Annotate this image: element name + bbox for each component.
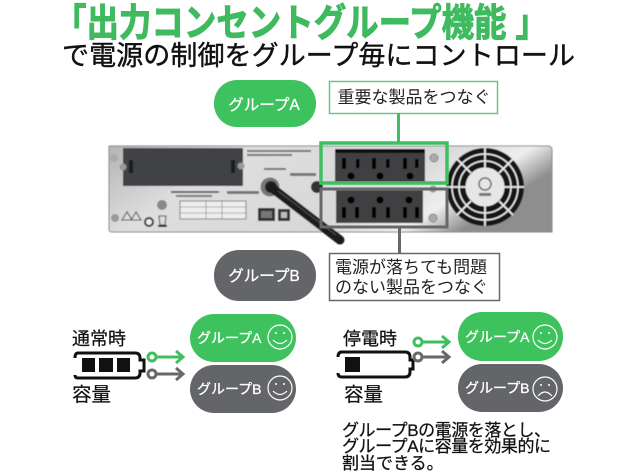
- cooling fan grille: [446, 148, 524, 226]
- callout: group B: のない製品をつなぐ: [335, 278, 488, 297]
- explanation text: グループBの電源を落とし、: [342, 421, 551, 440]
- arrow: green: [414, 336, 449, 348]
- rating table: [180, 201, 246, 219]
- group A label pill: グループA: [228, 96, 300, 114]
- network and USB ports: [258, 208, 290, 221]
- icon: low battery: [338, 352, 413, 377]
- callout: group A: [330, 82, 498, 114]
- pill: group A happy: グループA: [465, 329, 530, 345]
- connector line: group B: [398, 227, 401, 253]
- power inlet and cable: [260, 178, 340, 240]
- title: 「出力コンセントグループ機能 」: [54, 3, 548, 45]
- UPS rear panel photo: [109, 146, 552, 240]
- icon: full battery: [75, 353, 144, 378]
- pill: group A happy: グループA: [197, 330, 262, 346]
- pill: group B sad: [458, 364, 563, 412]
- explanation text: [342, 421, 551, 473]
- safety marks: [111, 200, 167, 227]
- breaker: [311, 181, 323, 193]
- pill: group B sad: グループB: [465, 380, 530, 396]
- pill: group A happy: [190, 314, 296, 362]
- highlight frame: group A outlets: [321, 143, 447, 183]
- small label text blocks: [171, 150, 316, 197]
- pill: group A happy: [458, 312, 563, 361]
- outage diagram: [338, 312, 563, 473]
- screw: [110, 154, 118, 162]
- connector line: group A: [397, 113, 400, 143]
- label: capacity: 容量: [344, 384, 383, 406]
- label: outage: 停電時: [343, 329, 397, 349]
- label: capacity: 容量: [72, 384, 111, 406]
- arrow: gray: [148, 368, 183, 380]
- highlight frame: group B outlets: [321, 189, 447, 227]
- subtitle: で電源の制御をグループ毎にコントロール: [62, 41, 575, 71]
- group B label pill: グループB: [228, 267, 300, 285]
- group B label pill: [214, 250, 316, 301]
- callout: group B: 電源が落ちても問題: [335, 258, 487, 277]
- callout: group B: [330, 254, 500, 300]
- pill: group B happy: グループB: [197, 381, 262, 397]
- group A label pill: [214, 80, 316, 127]
- callout: group A: 重要な製品をつなぐ: [338, 88, 490, 107]
- outlet group B: [336, 190, 423, 223]
- outlet screws: [429, 154, 438, 222]
- arrow: gray: [414, 351, 449, 363]
- arrow: green: [148, 351, 183, 363]
- explanation text: グループAに容量を効果的に: [342, 437, 551, 456]
- explanation text: 割当できる。: [342, 454, 444, 473]
- expansion card slot: [120, 148, 244, 186]
- outlet group A: [335, 149, 425, 182]
- normal operation diagram: [72, 314, 296, 413]
- label: normal: 通常時: [72, 329, 126, 349]
- chassis: [109, 146, 552, 232]
- pill: group B happy: [190, 365, 296, 413]
